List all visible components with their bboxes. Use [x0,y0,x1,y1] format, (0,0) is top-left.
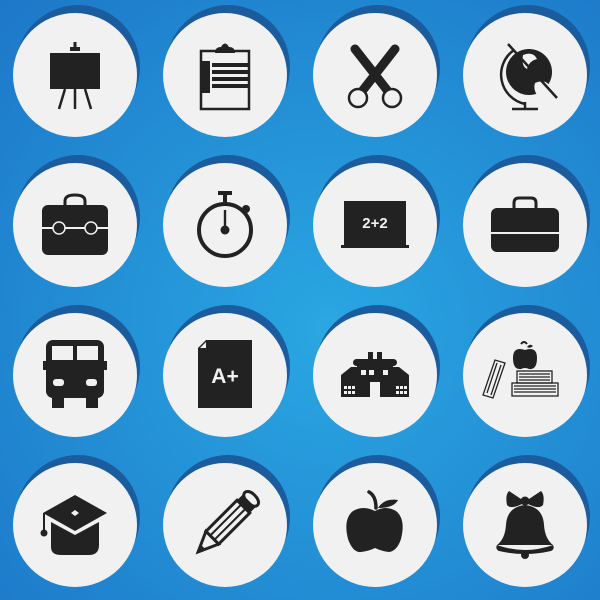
icon: pencil [163,455,290,587]
icon: A+ document: A+ [211,365,239,388]
icon: books and apple [463,305,590,437]
icon: graduation cap [13,455,140,587]
icon: clipboard [163,5,290,137]
icon: A+ document [163,305,290,437]
icon: stopwatch [163,155,290,287]
icon: blackboard 2+2: 2+2 [362,215,388,232]
icon: globe crossed [463,5,590,137]
icon: briefcase with buckles [13,155,140,287]
icon: apple [313,455,440,587]
icon: scissors [313,5,440,137]
icon: blackboard 2+2 [313,155,440,287]
icon: school building [313,305,440,437]
icon: easel [13,5,140,137]
icon: briefcase [463,155,590,287]
icon: bell with bow [463,455,590,587]
icon: bus [13,305,140,437]
